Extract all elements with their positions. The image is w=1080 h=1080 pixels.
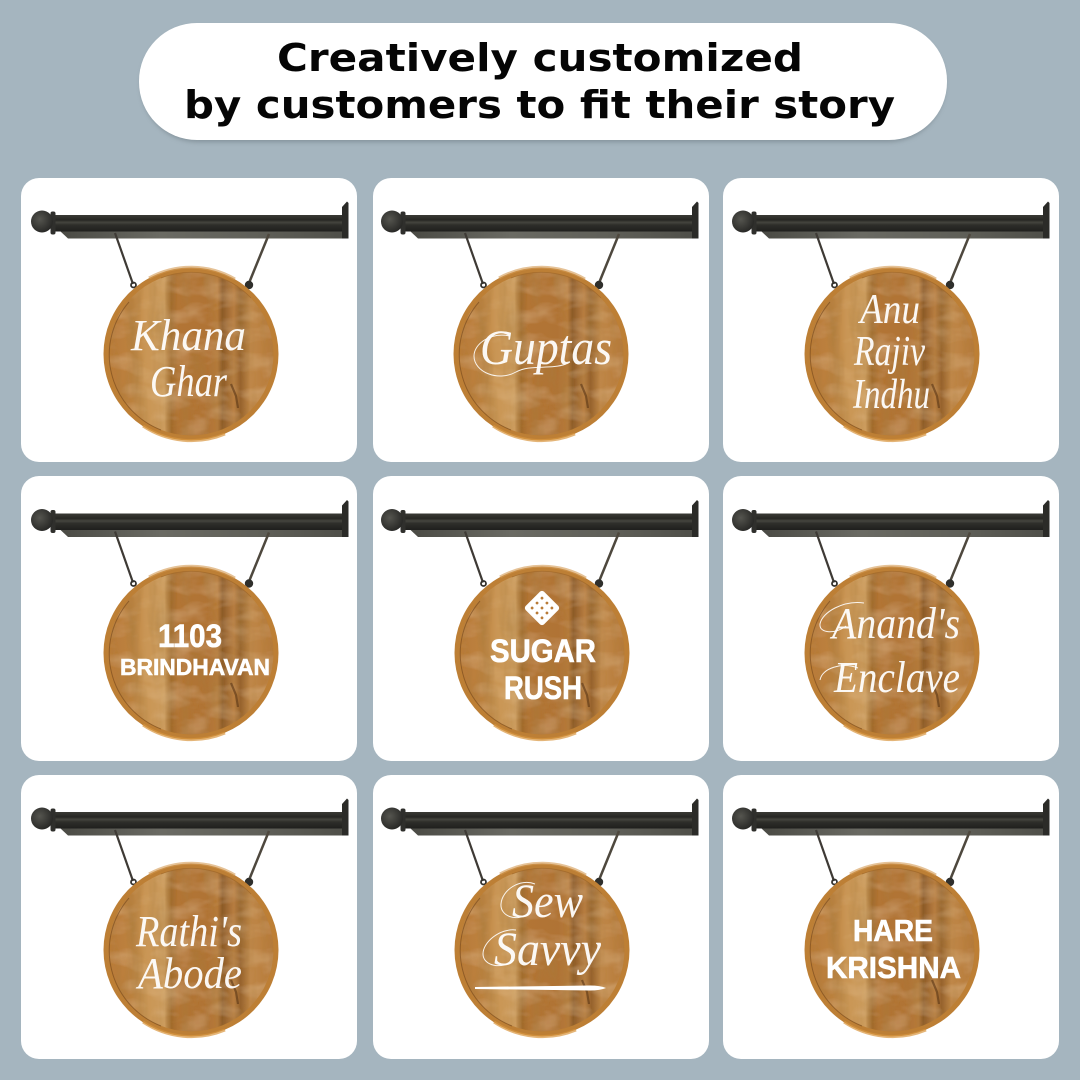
bracket [732,500,1050,537]
hanging wires [115,233,269,289]
sign text: SUGAR [490,633,596,669]
bracket [381,500,698,537]
panel: Guptas [373,178,709,462]
sign text [826,913,961,985]
flourish [474,335,566,376]
heading [184,36,895,127]
sign text: Rathi's [135,907,242,956]
sign text: Rajiv [853,329,925,375]
sign text: Indhu [852,372,930,418]
sign text: HARE [853,913,933,948]
hanging wires [816,233,970,289]
sign text: Abode [135,949,242,998]
wooden sign [104,566,278,740]
panel: Hare Krishna [723,775,1059,1059]
panel: 1103 Brindhavan [21,476,357,761]
hanging wires [816,830,970,886]
sign text: Guptas [480,319,612,375]
sign text [135,907,242,998]
sign text [120,618,270,680]
wooden sign [804,566,980,740]
wooden sign [104,267,278,441]
wooden sign [454,267,628,441]
sign text: Enclave [833,653,960,702]
flourish [483,882,535,966]
hanging wires [465,532,619,588]
icon: needle [475,986,606,990]
wooden sign [454,566,630,740]
bracket [31,202,348,238]
bracket [381,798,698,836]
hanging wires [465,233,619,289]
sign text [852,287,930,418]
sign text: Anand's [829,599,960,648]
hanging wires [115,532,269,588]
panel: Sugar Rush [373,476,709,761]
sign text: Ghar [150,357,228,406]
bracket [732,798,1050,836]
panel: Sew Savvy [373,775,709,1059]
heading: by customers to fit their story [184,83,895,127]
sign text: Khana [130,311,246,360]
hanging wires [816,532,970,588]
bracket [31,500,348,537]
sign text: Anu [857,287,920,333]
sign text [130,311,246,406]
hanging wires [115,830,269,886]
panel: Rathi's Abode [21,775,357,1059]
flourish [820,603,864,680]
sign text: BRINDHAVAN [120,654,270,680]
sign text: KRISHNA [826,950,961,985]
icon: biscuit [524,590,560,626]
wooden sign [104,863,278,1037]
wooden sign [804,863,980,1037]
bracket [732,202,1050,238]
sign text: Savvy [494,923,602,976]
sign text: RUSH [504,670,582,706]
title pill [139,23,947,142]
sign text [829,599,960,702]
wooden sign [804,267,980,441]
hanging wires [465,830,619,886]
panel: Khana Ghar [21,178,357,462]
wooden sign [454,863,630,1037]
sign text: 1103 [158,618,222,654]
sign text [490,633,596,706]
panel: Anand's Enclave [723,476,1059,761]
sign text: Sew [512,875,583,928]
sign text [494,875,602,976]
heading: Creatively customized [277,36,803,80]
panel: Anu Rajiv Indhu [723,178,1059,462]
bracket [381,202,698,238]
bracket [31,798,348,836]
